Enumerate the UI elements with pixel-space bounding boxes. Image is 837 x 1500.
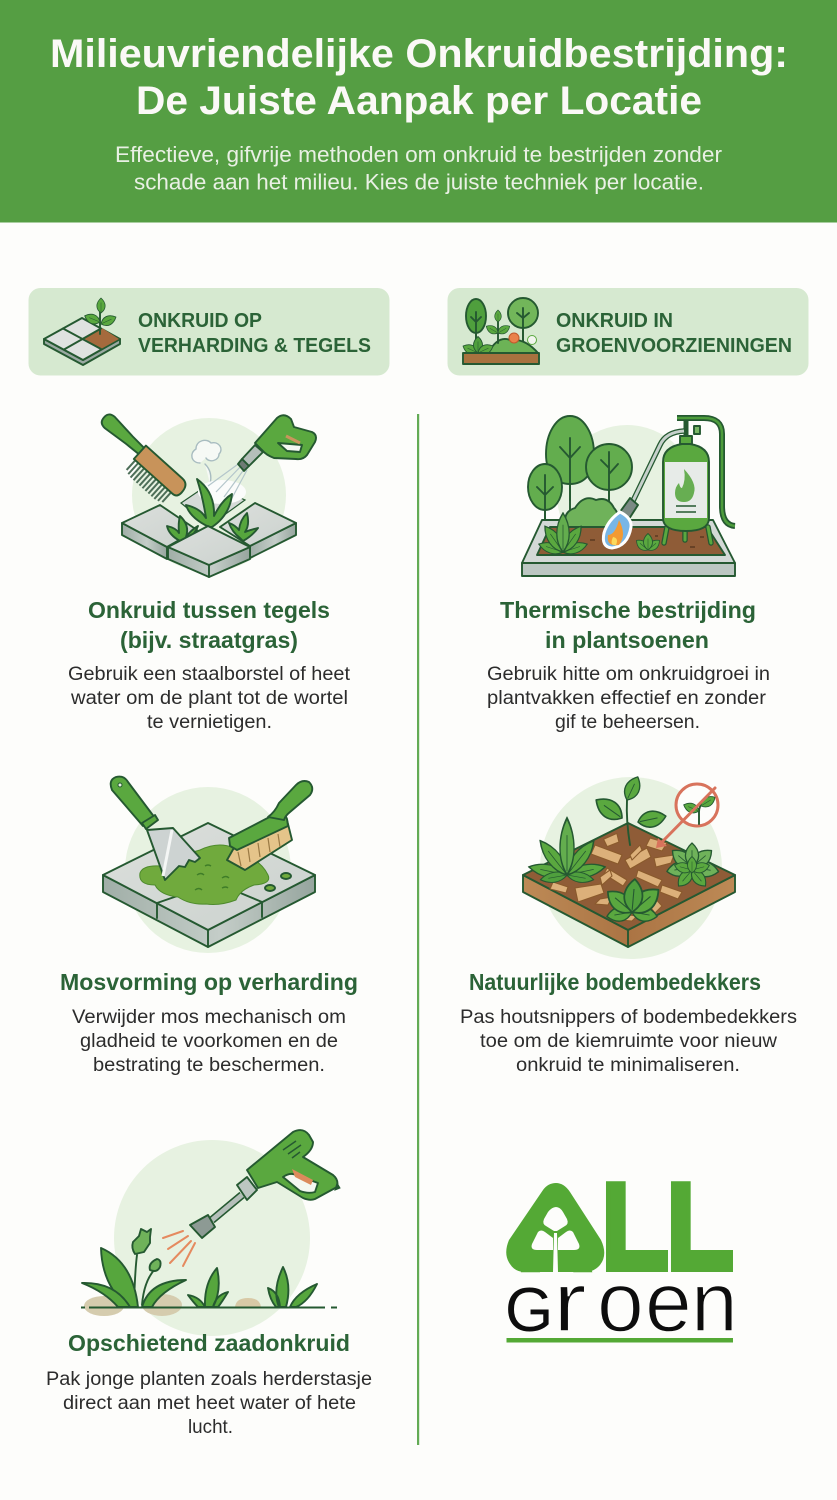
heading [88, 597, 330, 653]
icon: moss patch [140, 845, 269, 904]
icon: small weeds [167, 516, 198, 543]
icon: trowel [111, 777, 200, 880]
icon: gas cylinder [663, 418, 735, 543]
body text: bestrating te beschermen. [93, 1055, 325, 1076]
icon: steam cloud [192, 440, 221, 484]
wood chips [550, 830, 682, 921]
icon: bush [565, 498, 618, 527]
logo mark: rounded triangle with leaf [506, 1183, 604, 1272]
panel: onkruid in groenvoorzieningen [448, 288, 808, 376]
logo word: all [522, 1157, 731, 1296]
panel heading [556, 309, 792, 357]
card: opschietend zaadonkruid [46, 1130, 372, 1438]
subtitle [115, 142, 723, 194]
body text: plantvakken effectief en zonder [487, 688, 767, 709]
logo word: all: A [522, 1184, 591, 1291]
icon: seed weed [82, 1229, 186, 1307]
icon: no-weed sign with arrow [656, 784, 718, 848]
body text: gladheid te voorkomen en de [80, 1031, 338, 1052]
subtitle: schade aan het milieu. Kies de juiste techniek per locatie. [134, 170, 704, 194]
body text: te vernietigen. [147, 712, 272, 733]
icon: middle weed [188, 1268, 228, 1307]
icon: garden bed with trees [461, 298, 539, 364]
icon: upright plant [591, 774, 668, 845]
title [50, 32, 788, 123]
heading: (bijv. straatgras) [120, 627, 298, 653]
body text: toe om de kiemruimte voor nieuw [480, 1031, 777, 1052]
body text: direct aan met heet water of hete [63, 1393, 356, 1414]
logo word: groen: oen [597, 1255, 738, 1349]
body text: Pas houtsnippers of bodembedekkers [460, 1007, 797, 1028]
divider [417, 414, 419, 1445]
logo word: groen: r [553, 1255, 587, 1349]
icon: planting bed frame [522, 520, 735, 563]
icon: hose [677, 418, 735, 526]
body text: Gebruik een staalborstel of heet [68, 664, 351, 685]
heading: Opschietend zaadonkruid [68, 1330, 350, 1356]
panel heading: GROENVOORZIENINGEN [556, 334, 792, 357]
logo letter feet [607, 1250, 733, 1272]
icon: large weed [186, 479, 232, 527]
illustration: mulch bed with plants [523, 774, 735, 959]
panel heading: VERHARDING & TEGELS [138, 334, 371, 357]
illustration: heat gun and seed weeds [81, 1130, 340, 1336]
icon: scrub brush [227, 781, 312, 870]
panel heading: ONKRUID IN [556, 309, 673, 332]
icon: wire brush [86, 412, 189, 510]
panel: onkruid op verharding en tegels [28, 288, 390, 376]
icon: right weed [268, 1267, 317, 1307]
body text: onkruid te minimaliseren. [516, 1055, 740, 1076]
panel heading [138, 309, 371, 357]
logo word: all: L [601, 1157, 666, 1296]
logo underline [506, 1338, 733, 1342]
heading: in plantsoenen [545, 627, 709, 653]
body text: Pak jonge planten zoals herderstasje [46, 1369, 372, 1390]
illustration: brush and steam washer on tiles [86, 412, 316, 577]
icon: heat gun [190, 1130, 340, 1238]
illustration: trowel and brush on moss [103, 777, 315, 953]
card: onkruid tussen tegels [68, 412, 351, 733]
body text: Gebruik hitte om onkruidgroei in [487, 664, 770, 685]
panel heading: ONKRUID OP [138, 309, 262, 332]
icon: ground line [81, 1306, 337, 1308]
title: De Juiste Aanpak per Locatie [136, 79, 702, 123]
body text: Verwijder mos mechanisch om [72, 1007, 346, 1028]
header banner [0, 0, 837, 222]
illustration: gas burner in flower bed [522, 416, 735, 576]
body text: gif te beheersen. [555, 712, 700, 733]
heading: Thermische bestrijding [500, 597, 756, 623]
body text [68, 664, 351, 733]
heading: Mosvorming op verharding [60, 969, 358, 995]
body text: lucht. [188, 1417, 233, 1438]
body text [46, 1369, 372, 1438]
icon: trees [528, 416, 632, 525]
icon: succulent [666, 843, 720, 890]
logo word: all: L [666, 1157, 731, 1296]
icon: plant [537, 513, 589, 557]
body text [487, 664, 770, 733]
card: natuurlijke bodembedekkers [460, 774, 797, 1076]
card: thermische bestrijding [487, 416, 770, 733]
heading: Natuurlijke bodembedekkers [469, 969, 761, 995]
heading: Onkruid tussen tegels [88, 597, 330, 623]
logo word: groen: G [505, 1276, 553, 1345]
logo word: groen [505, 1255, 738, 1349]
heading [500, 597, 756, 653]
icon: flame lance [603, 431, 684, 548]
card: mosvorming [60, 777, 358, 1076]
icon: heat lines [163, 1231, 195, 1266]
subtitle: Effectieve, gifvrije methoden om onkruid te bestrijden zonder [115, 142, 723, 167]
icon: leafy plant left [528, 818, 606, 885]
body text [72, 1007, 346, 1076]
body text: water om de plant tot de wortel [70, 688, 348, 709]
icon: paving tiles with sprout [44, 298, 120, 365]
icon: front plant [602, 878, 665, 923]
icon: spray [208, 462, 247, 498]
logo: All Groen [505, 1157, 738, 1349]
body text [460, 1007, 797, 1076]
icon: pressure gun [238, 415, 316, 471]
title: Milieuvriendelijke Onkruidbestrijding: [50, 32, 788, 76]
